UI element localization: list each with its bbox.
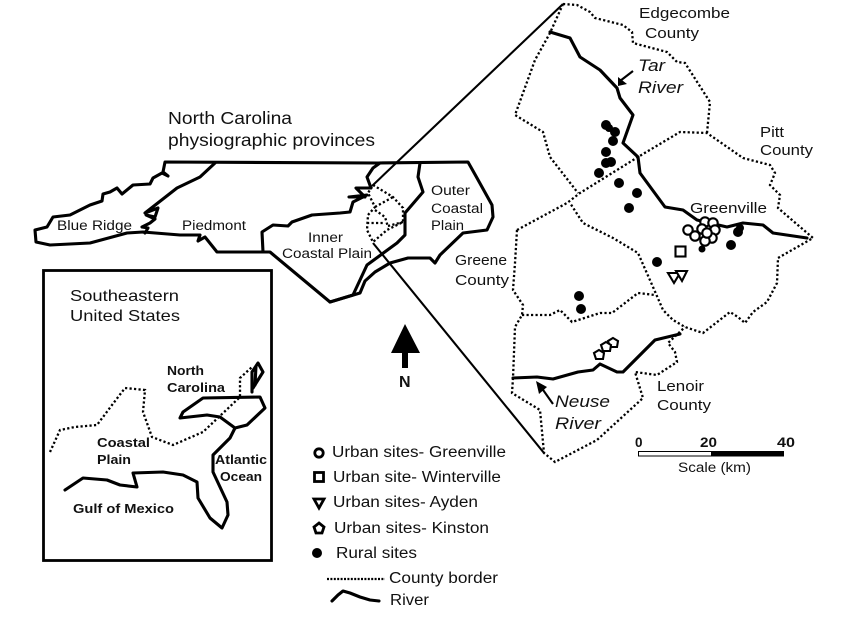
Tar River: [550, 32, 807, 238]
county borders: [512, 4, 813, 462]
legend item: Rural sites: Rural sites: [336, 545, 417, 562]
panel: Southeastern United States inset: [44, 270, 272, 560]
Neuse River: [513, 334, 680, 379]
label: Tar River: Tar: [638, 56, 666, 75]
scale bar: 20: [700, 435, 717, 450]
label: Lenoir County: [657, 378, 712, 414]
arrow: Neuse River: [536, 381, 553, 404]
boundary: Blue Ridge and Piedmont: [142, 163, 215, 233]
label: Gulf of Mexico: Gulf of Mexico: [73, 502, 174, 516]
legend item: River: River: [390, 592, 429, 609]
scale bar: 0: [635, 435, 643, 450]
legend item: Urban sites Greenville: Urban sites- Greenville: [332, 444, 506, 461]
label: North Carolina: North: [167, 364, 204, 378]
inset title: Southeastern: [70, 288, 179, 305]
label: North Carolina: [167, 364, 226, 395]
label: Blue Ridge: Blue Ridge: [57, 218, 132, 233]
state outline: [35, 162, 493, 302]
label: Tar River: River: [638, 78, 685, 97]
arrow: Tar River: [618, 71, 633, 86]
label: Neuse River: River: [555, 414, 603, 433]
label: Lenoir County: Lenoir: [657, 378, 704, 395]
Atlantic and Gulf coastline: [65, 428, 235, 528]
label: Inner Coastal Plain: Inner: [308, 230, 344, 245]
label: Coastal Plain: Plain: [97, 453, 131, 467]
legend item: Rural sites: [312, 545, 417, 562]
inset title: [70, 288, 180, 325]
urban sites: Greenville: [683, 217, 720, 252]
North Carolina outline: [180, 397, 265, 428]
panel: North Carolina physiographic provinces map: [35, 108, 493, 302]
label: Pitt County: County: [760, 142, 814, 159]
icon: north arrow: N: [399, 374, 411, 391]
label: Coastal Plain: Coastal: [97, 436, 150, 450]
label: Greene County: Greene: [455, 252, 507, 269]
label: Greene County: [455, 252, 510, 289]
coastal plain boundary: [50, 367, 252, 452]
label: Pitt County: [760, 124, 814, 159]
heading: North Carolina physiographic provinces: North Carolina: [168, 108, 292, 128]
label: Outer Coastal Plain: Plain: [431, 218, 464, 233]
heading: North Carolina physiographic provinces: physiographic provinces: [168, 130, 375, 150]
boundary: Piedmont and Inner Coastal Plain: [262, 163, 380, 252]
legend item: County border: County border: [389, 570, 498, 587]
legend item: Urban site Winterville: Urban site- Winterville: [333, 469, 501, 486]
label: Inner Coastal Plain: Coastal Plain: [282, 246, 372, 261]
scale bar: 40: [777, 435, 795, 450]
label: Atlantic Ocean: Ocean: [220, 470, 262, 484]
rural site markers: [574, 120, 744, 314]
label: Outer Coastal Plain: [431, 183, 483, 233]
urban sites: Ayden: [668, 271, 687, 283]
northern coast: [252, 363, 263, 392]
label: North Carolina: Carolina: [167, 381, 226, 395]
label: Outer Coastal Plain: Outer: [431, 183, 471, 198]
label: Coastal Plain: [97, 436, 150, 467]
urban sites: Kinston: [594, 338, 618, 359]
legend item: Urban sites Ayden: Urban sites- Ayden: [333, 494, 478, 511]
inset frame: [44, 270, 272, 560]
label: Lenoir County: County: [657, 397, 712, 414]
label: Edgecombe County: [639, 5, 730, 42]
panel: county detail map: [455, 4, 814, 462]
boundary: Inner and Outer Coastal Plain: [330, 163, 423, 302]
legend: [312, 444, 506, 609]
urban site: Winterville: [676, 246, 686, 256]
label: Edgecombe County: County: [645, 25, 700, 42]
inset title: United States: [70, 308, 180, 325]
zoom connector lines: [372, 4, 563, 453]
label: Neuse River: [555, 392, 610, 433]
label: Edgecombe County: Edgecombe: [639, 5, 730, 22]
label: Tar River: [638, 56, 685, 97]
heading: North Carolina physiographic provinces: [168, 108, 375, 150]
label: Greene County: County: [455, 272, 510, 289]
label: Greenville: Greenville: [690, 200, 767, 217]
legend item: Urban sites Kinston: Urban sites- Kinston: [334, 520, 489, 537]
label: Atlantic Ocean: Atlantic: [215, 453, 267, 467]
mini county borders: [367, 185, 403, 242]
label: Neuse River: Neuse: [555, 392, 610, 411]
legend item: River: [332, 591, 429, 609]
scale bar: [635, 435, 795, 475]
label: Atlantic Ocean: [215, 453, 267, 484]
label: Pitt County: Pitt: [760, 124, 785, 141]
label: Inner Coastal Plain: [282, 230, 372, 261]
label: Piedmont: Piedmont: [182, 218, 246, 233]
icon: north arrow: [391, 324, 420, 391]
scale bar: Scale (km): [678, 460, 751, 475]
label: Outer Coastal Plain: Coastal: [431, 201, 483, 216]
